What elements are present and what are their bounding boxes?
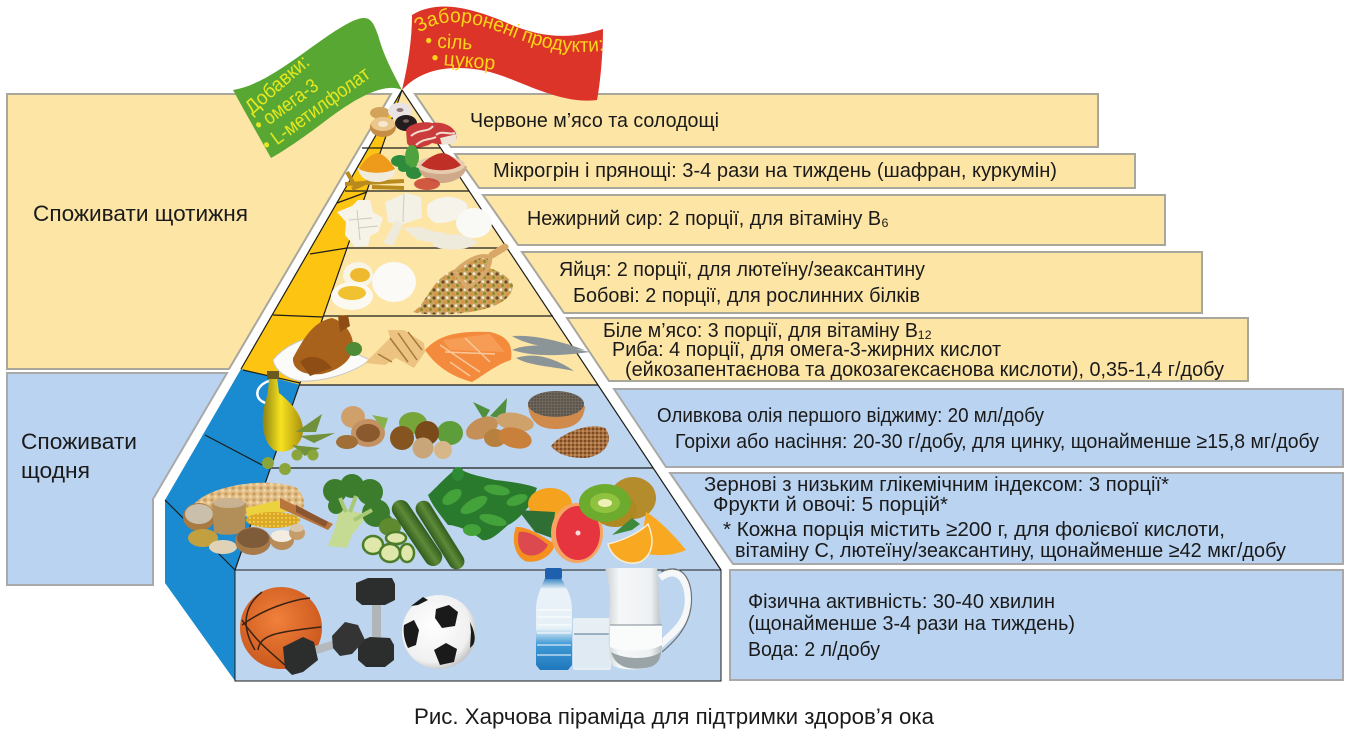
icon: spinach (428, 467, 537, 540)
icon: soccer ball (402, 595, 476, 669)
icon: kiwi (579, 477, 656, 527)
icon: sardines (512, 336, 590, 371)
flag: forbidden foods: Заборонені продукти: (414, 8, 603, 55)
icon: olive oil bottle (257, 371, 335, 475)
flag: forbidden foods: • сіль (425, 30, 473, 54)
panel: physical activity and water: Вода: 2 л/добу (748, 638, 881, 661)
icon: chia seed bowl (528, 391, 585, 429)
icon: grilled chicken slices (365, 330, 425, 368)
panel: grains, fruit and vegetables: вітаміну С, лютеїну/зеаксантину, щонайменше ≥42 мкг/добу (735, 539, 1287, 562)
panels on the right (415, 94, 1343, 680)
icon: almonds (462, 398, 535, 452)
panel: red meat and sweets: Червоне м’ясо та солодощі (470, 109, 719, 132)
panel: microgreens and spices (455, 154, 1135, 188)
panel: physical activity and water (730, 570, 1343, 680)
panel: microgreens and spices: Мікрогрін і прянощі: 3-4 рази на тиждень (шафран, куркумін) (493, 159, 1057, 182)
icon: legumes and scoop (413, 247, 513, 315)
panel: low-fat cheese (483, 195, 1165, 245)
icon: basketball (240, 587, 322, 669)
panel: grains, fruit and vegetables: Фрукти й овочі: 5 порцій* (713, 493, 948, 516)
flag: supplements (233, 18, 402, 158)
icon: grains (183, 483, 333, 555)
icon: hazelnuts (390, 412, 463, 459)
icon: cheese (337, 193, 492, 249)
pyramid body (165, 90, 721, 681)
icon: orange slices (608, 512, 686, 563)
caption: Рис. Харчова піраміда для підтримки здоров’я ока (414, 704, 935, 729)
icon: water glass (573, 618, 611, 670)
icon: roast chicken on plate (273, 315, 370, 381)
flag: supplements: Добавки: (241, 51, 314, 119)
icon: boiled eggs (331, 262, 416, 310)
panel: physical activity and water: (щонайменше 3-4 рази на тиждень) (748, 612, 1075, 635)
panel: white meat and fish (567, 318, 1248, 381)
panel: olive oil and nuts: Горіхи або насіння: 20-30 г/добу, для цинку, щонайменше ≥15,8 мг/добу (675, 430, 1320, 453)
icon: dumbbells (283, 578, 395, 675)
panel: white meat and fish: Риба: 4 порції, для омега-3-жирних кислот (612, 338, 1002, 361)
panel: eggs and legumes: Бобові: 2 порції, для рослинних білків (573, 284, 920, 307)
icon: salmon (425, 332, 511, 382)
panel: white meat and fish: (ейкозапентаєнова та докозагексаєнова кислоти), 0,35-1,4 г/добу (625, 358, 1225, 381)
icon: walnuts (336, 406, 388, 449)
panel: olive oil and nuts: Оливкова олія першого віджиму: 20 мл/добу (657, 404, 1045, 427)
panel: red meat and sweets (415, 94, 1098, 147)
panel: olive oil and nuts (614, 389, 1343, 467)
icon: red meat (406, 122, 457, 148)
panel: eggs and legumes: Яйця: 2 порції, для лютеїну/зеаксантину (559, 258, 926, 281)
icon: grapefruit (514, 488, 603, 563)
panel: consume daily (7, 373, 227, 585)
flag: forbidden foods (402, 6, 603, 101)
icon: water bottle (536, 568, 572, 670)
icon: donuts (370, 102, 417, 137)
panel: eggs and legumes (522, 252, 1202, 313)
panel: low-fat cheese: Нежирний сир: 2 порції, для вітаміну В₆ (527, 207, 889, 230)
icon: zucchini (363, 496, 467, 572)
icon: basil leaves (391, 145, 422, 179)
flag: forbidden foods: • цукор (431, 47, 496, 75)
icon: turmeric and roots (345, 153, 404, 189)
label: consume weekly: Споживати щотижня (33, 201, 248, 226)
icon: flax seeds (551, 426, 609, 458)
panel: grains, fruit and vegetables: Зернові з низьким глікемічним індексом: 3 порції* (704, 473, 1169, 496)
icon: pitcher (605, 568, 692, 669)
panel: white meat and fish: Біле м’ясо: 3 порції, для вітаміну В₁₂ (603, 319, 932, 342)
flag: supplements: • омега-3 (250, 75, 323, 136)
panel: grains, fruit and vegetables (670, 473, 1343, 564)
icon: broccoli (323, 474, 393, 548)
label: consume daily: щодня (21, 458, 90, 483)
icon: red spice bowl (414, 153, 467, 190)
label: consume daily: Споживати (21, 429, 137, 454)
flag: supplements: • L-метилфолат (258, 63, 374, 156)
panel: grains, fruit and vegetables: * Кожна порція містить ≥200 г, для фолієвої кислоти, (723, 518, 1225, 541)
panel: consume weekly (7, 94, 391, 369)
panel: physical activity and water: Фізична активність: 30-40 хвилин (748, 590, 1055, 613)
panel: base front face (235, 570, 721, 681)
